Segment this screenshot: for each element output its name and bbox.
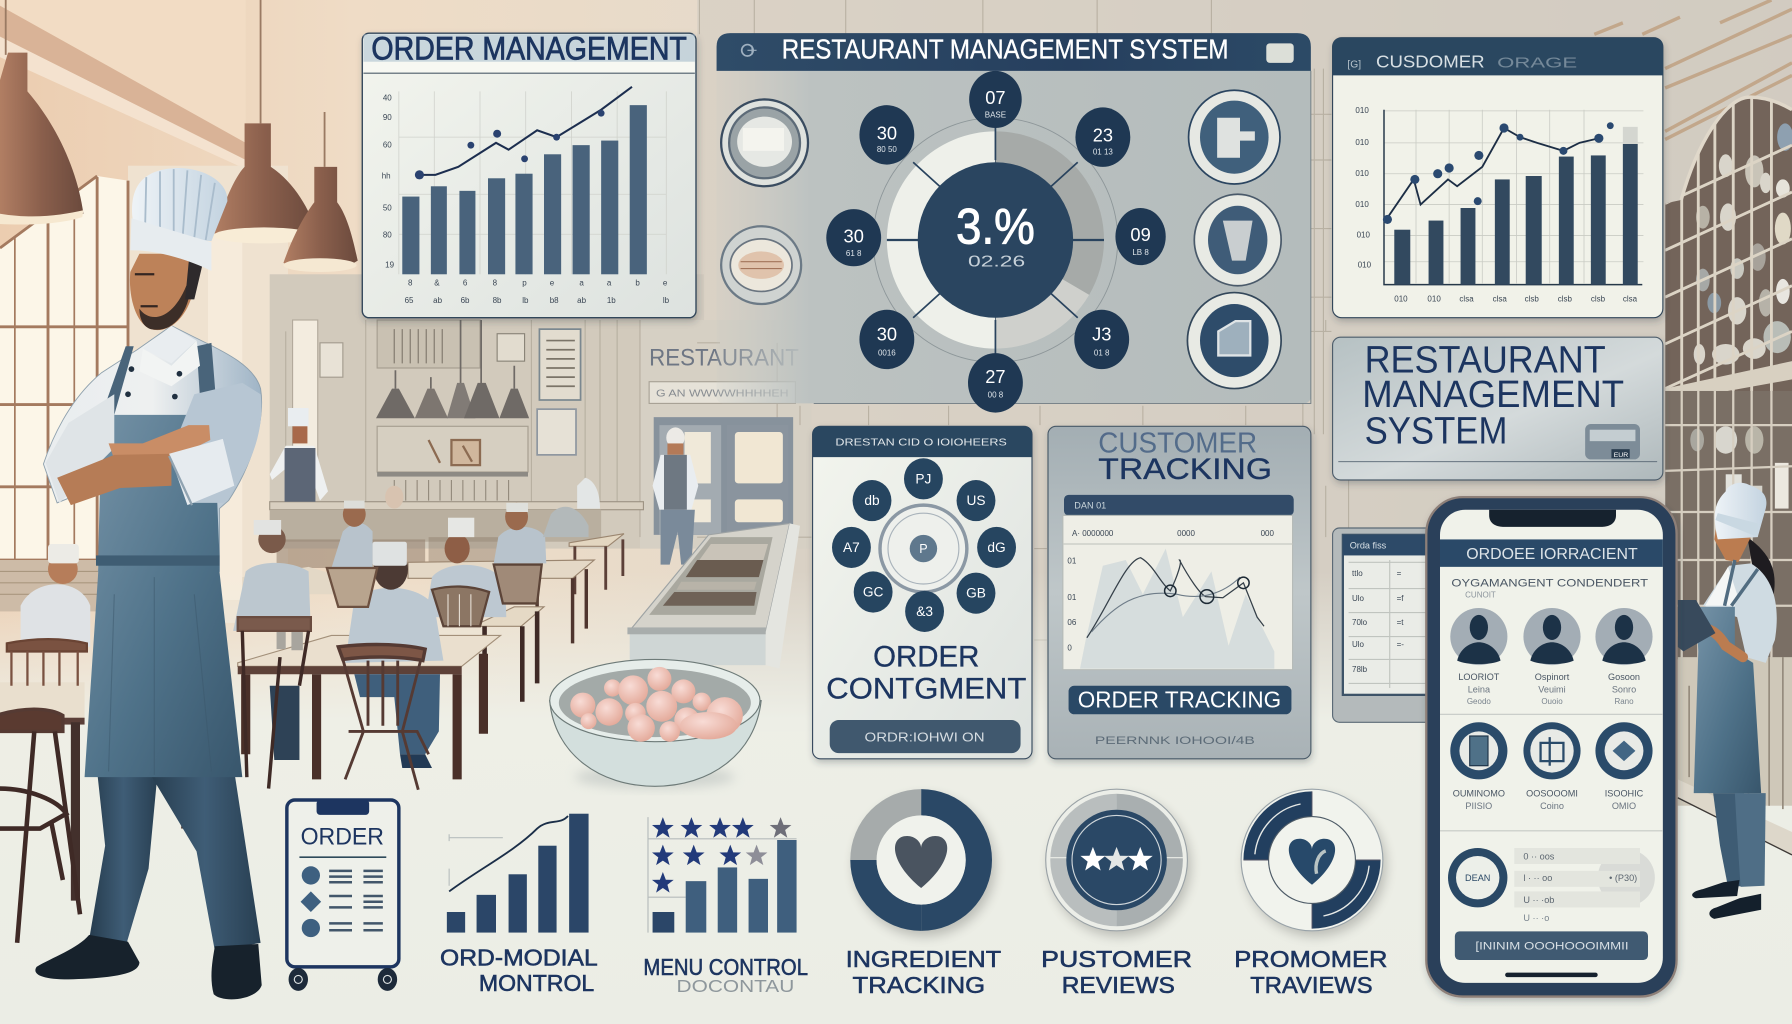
phone mockup: CUNOIT [1465,591,1496,600]
donut gauge [873,118,1118,362]
avatars [1450,608,1653,665]
label: menu control: DOCONTAU [677,976,794,996]
combo chart: customers: clsa [1493,295,1507,304]
female chef [1678,483,1777,919]
hub diagram: dG [987,540,1006,555]
data nodes [826,71,1166,413]
data nodes: LB 8 [1132,248,1149,257]
panel: customer management chart [1333,38,1663,318]
monitor: = [1397,569,1402,578]
module icons [1450,722,1653,779]
hub diagram: GB [966,586,986,601]
order summary rows: • (P30) [1609,873,1637,883]
data nodes: 00 8 [988,391,1004,400]
panel: customer tracking: TRACKING [1098,453,1272,486]
icon tile: order tablet [287,800,399,991]
label: promomer traviews: TRAVIEWS [1250,972,1373,998]
hub diagram: P [919,542,928,556]
phone mockup: ISOOHIC [1605,789,1644,799]
monitor: =- [1397,640,1404,649]
bar chart: orders: p [522,279,527,288]
combo chart: customers: 010 [1394,295,1408,304]
monitor [1333,528,1435,722]
hub diagram: &3 [916,604,933,619]
phone mockup: OOSOOOMI [1526,789,1578,799]
bar chart: orders: 8 [493,279,498,288]
label: pustomer reviews: REVIEWS [1062,972,1175,998]
right icons [1187,90,1281,389]
bar chart: orders: e [663,279,668,288]
line chart: tracking: 0000 [1177,529,1195,538]
bar chart: orders: 80 [383,231,392,240]
bar chart: orders: 8 [408,279,413,288]
label: ingredient tracking: TRACKING [853,972,985,998]
icon: customer reviews badge [1046,789,1191,937]
data nodes: 27 [985,366,1006,387]
combo chart: customers: 010 [1355,169,1369,178]
order summary rows [1448,848,1655,923]
phone mockup: PIISIO [1465,801,1492,811]
hub diagram [832,458,1016,632]
combo chart: customers: clsb [1591,295,1606,304]
bar chart: orders: lb [663,296,670,305]
hub diagram: db [864,493,880,508]
bar chart: orders: 6b [461,296,470,305]
monitor: Ulo [1352,640,1365,649]
data nodes: BASE [985,111,1006,120]
bowl of ingredients [550,659,761,789]
phone mockup: Rano [1614,697,1634,706]
header bar: RESTAURANT MANAGEMENT SYSTEM [782,33,1229,64]
panel: order contgment: CONTGMENT [826,672,1026,705]
data nodes: 09 [1130,224,1151,245]
line chart: tracking: 01 [1067,593,1077,602]
monitor: 70lo [1352,618,1368,627]
small pendant lamps [376,320,529,418]
combo chart: customers: clsb [1558,295,1572,304]
combo chart: customers: 010 [1357,231,1370,240]
combo chart: customers [1355,106,1643,304]
monitor: Ulo [1352,594,1365,603]
line chart: tracking: A· 0000000 [1072,529,1114,538]
restaurant sign: RESTAURANT [649,345,799,372]
chef coat [43,326,262,571]
phone mockup [1426,497,1677,997]
hub diagram: A7 [843,540,860,555]
bar chart: orders: 90 [383,113,392,122]
label: menu control [643,954,808,996]
panel: customer tracking: PEERNNK IOHOOI/4B [1095,735,1255,747]
phone mockup: OYGAMANGENT CONDENDERT [1451,577,1648,589]
label: pustomer reviews [1041,946,1192,998]
button [1455,931,1648,960]
right wall shelves [1665,97,1792,855]
button: [ININIM OOOHOOOIMMII [1475,941,1629,953]
bar chart: orders: a [607,279,612,288]
order summary rows: 0 ·· oos [1523,851,1555,861]
panel: restaurant management system title card [1333,337,1663,480]
order summary rows: DEAN [1465,873,1490,883]
bar chart: orders: b [635,279,640,288]
chef crossed arms [46,383,261,505]
combo chart: customers: 010 [1355,138,1369,147]
heading: customer tracking faded: [G] [1347,59,1361,70]
chef head [130,251,203,330]
hub diagram: GC [863,585,884,600]
label: promomer traviews: PROMOMER [1234,946,1387,972]
chef shoes [35,935,262,999]
combo chart: customers: clsa [1459,295,1474,304]
monitor: ttlo [1352,569,1363,578]
panel: restaurant management system title card: MANAGEMENT [1362,373,1624,415]
bar chart: orders: ab [577,296,587,305]
phone mockup: Coino [1540,801,1564,811]
data nodes: 30 [877,324,897,345]
panel: customer tracking: DAN 01 [1074,501,1106,511]
combo chart: customers: 010 [1427,295,1441,304]
line chart: tracking: 0 [1067,643,1072,652]
panel: order management [362,30,696,318]
order summary rows: l · ·· oo [1523,873,1552,883]
button [830,720,1021,753]
label: menu control: MENU CONTROL [643,954,808,980]
chef hat [130,168,227,271]
bar chart: orders: 1b [607,296,616,305]
phone mockup: LOORIOT [1458,672,1500,682]
icon tile: growth bars [447,814,589,933]
bar chart: orders [382,87,670,305]
label: ord-modial montrol: MONTROL [479,970,594,996]
order summary rows: U ·· ·o [1523,913,1549,923]
restaurant sign [649,345,799,403]
bar chart: orders: 6 [463,279,468,288]
kitchen back wall [270,320,643,568]
heading: customer tracking faded: ORAGE [1497,55,1577,71]
bar chart: orders: hh [382,171,391,180]
hub diagram: US [966,493,986,508]
restaurant sign: G AN WWWWHHHHEH [656,389,789,400]
data nodes: 80 50 [877,145,897,154]
bar chart: orders: 50 [383,203,392,212]
icon: cash register [1585,424,1640,459]
label: ingredient tracking: INGREDIENT [846,946,1001,972]
line chart: tracking: 01 [1067,556,1077,565]
chef trousers [89,771,261,951]
icon tile: order tablet: ORDER [301,824,384,851]
data nodes: 07 [985,87,1006,108]
heading: customer tracking faded: CUSDOMER [1376,51,1485,71]
main chef [35,168,262,999]
heading: order management: ORDER MANAGEMENT [371,30,687,66]
panel: restaurant management system dashboard [717,33,1311,413]
window [0,176,128,611]
pendant lamps [0,0,358,272]
bar chart: orders: & [434,279,440,288]
label: ingredient tracking [846,946,1001,998]
bar chart: orders: 60 [383,140,392,149]
bar chart: orders: a [579,279,584,288]
monitor: 78lb [1352,665,1368,674]
panel: customer tracking: CUSTOMER [1098,428,1257,460]
data nodes: 23 [1093,125,1113,146]
monitor: =t [1397,618,1404,627]
dining room tables and chairs [0,534,624,901]
pill: order tracking: ORDER TRACKING [1078,686,1281,712]
icon: promomer reviews badge [1241,789,1386,937]
panel: order contgment: DRESTAN CID O IOIOHEERS [835,438,1008,449]
icon tile: star ratings bars [648,817,797,933]
label: promomer traviews [1234,946,1387,998]
combo chart: customers: 010 [1355,200,1369,209]
bar chart: orders: 40 [383,94,392,103]
chef apron [85,343,242,777]
panel: order contgment [813,426,1032,759]
bar chart: orders: 8b [493,296,502,305]
dining chairs [0,565,542,943]
data nodes: 30 [877,122,897,143]
bar chart: orders: 65 [405,296,414,305]
data nodes: 01 8 [1094,348,1110,357]
combo chart: customers: clsa [1623,295,1638,304]
icon: cash register: EUR [1614,452,1628,459]
serving counter [627,523,800,669]
phone mockup: OMIO [1612,801,1636,811]
data nodes: 61 8 [846,249,862,258]
donut gauge: 02.26 [968,253,1025,270]
bar chart: orders: e [550,279,555,288]
panel: customer tracking [1048,426,1311,759]
line chart: tracking: 000 [1261,529,1274,538]
monitor: Orda fiss [1350,541,1387,551]
bar chart: orders: lb [522,296,529,305]
data nodes: J3 [1092,324,1111,345]
phone mockup: Sonro [1612,685,1636,695]
phone mockup: Geodo [1467,697,1491,706]
monitor: =f [1397,594,1404,603]
donut gauge: 3.% [956,197,1035,254]
phone mockup: Ouoio [1541,697,1563,706]
panel: restaurant management system title card: RESTAURANT [1365,339,1606,381]
order summary rows: U ·· ·ob [1523,895,1554,905]
heading: customer tracking faded [1347,51,1577,71]
bar chart: orders: ab [433,296,443,305]
combo chart: customers: 010 [1358,260,1372,269]
phone mockup: OUMINOMO [1453,789,1505,799]
phone mockup: Veuimi [1538,685,1566,695]
panel: restaurant management system title card: SYSTEM [1365,409,1507,451]
button: ORDR:IOHWI ON [865,731,985,745]
combo chart: customers: clsb [1525,295,1539,304]
chef collar and buttons [125,326,200,399]
bar chart: orders: b8 [550,296,559,305]
data nodes: 0016 [878,348,896,357]
phone mockup: Leina [1468,685,1491,695]
data nodes: 01 13 [1093,147,1113,156]
data nodes: 30 [844,225,864,246]
label: ord-modial montrol: ORD-MODIAL [440,945,598,971]
phone mockup: Ospinort [1535,672,1570,682]
seated chefs [21,478,600,768]
panel: order contgment: ORDER [873,640,979,673]
label: ord-modial montrol [440,945,598,996]
icon: ingredient tracking donut [850,789,995,937]
hub diagram: PJ [915,471,931,486]
bar chart: orders: 19 [385,260,395,269]
right wall rafters [1594,0,1792,139]
background chef at door [653,427,698,565]
doors [654,417,793,535]
left dish icons [721,99,808,304]
background chef at counter [270,408,328,502]
label: pustomer reviews: PUSTOMER [1041,946,1192,972]
line chart: tracking [1063,515,1293,670]
phone mockup: ORDOEE IORRACIENT [1466,546,1638,563]
phone mockup: Gosoon [1608,672,1640,682]
combo chart: customers: 010 [1355,106,1369,115]
line chart: tracking: 06 [1067,618,1077,627]
